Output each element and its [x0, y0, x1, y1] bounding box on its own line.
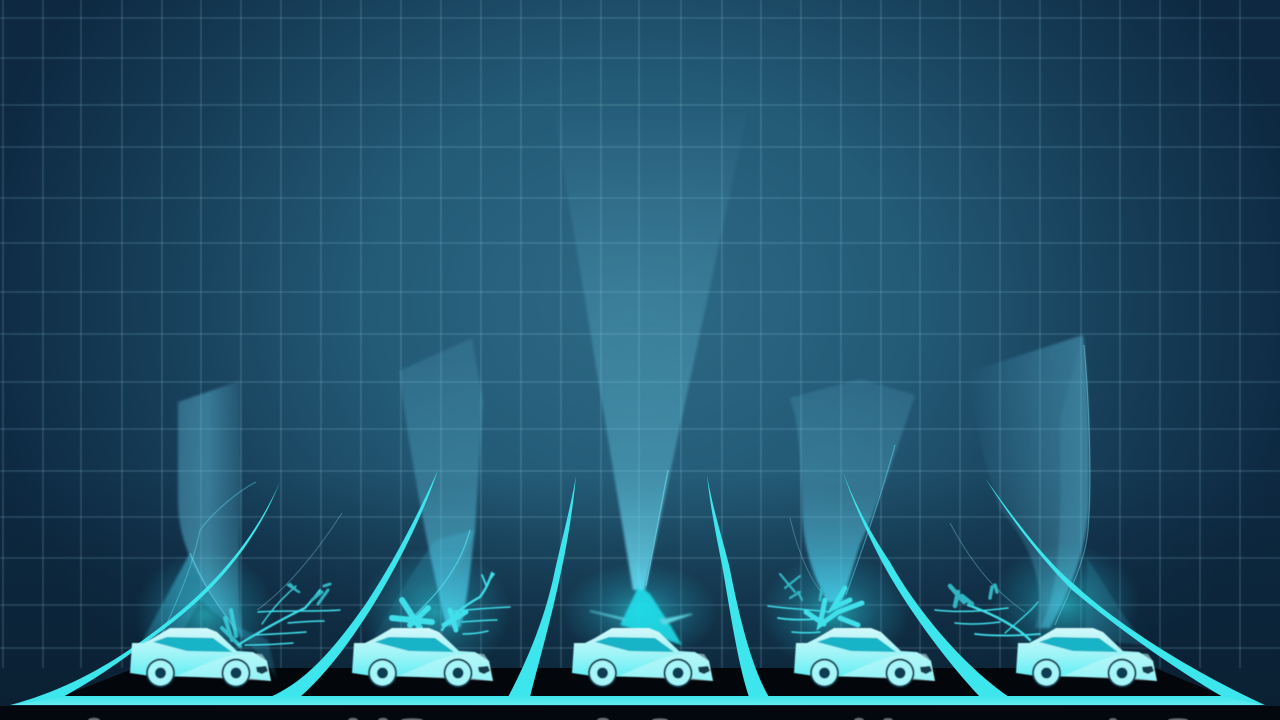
- panel: branches car 2: [392, 573, 510, 634]
- panel: branches car 1: [222, 584, 340, 646]
- road: curved edge 2: [270, 470, 438, 697]
- panel: beam car 4: [760, 379, 915, 670]
- panel: beam car 1: [135, 381, 342, 680]
- car 4: [794, 628, 935, 688]
- car 5: [1016, 628, 1157, 688]
- car 2: [352, 628, 493, 688]
- road: curved edge 5: [843, 472, 1009, 697]
- panel: impact star car 3: [590, 560, 692, 645]
- road: curved edge 4: [707, 475, 769, 697]
- road: curved edge 3: [508, 476, 576, 697]
- panel: branches car 4: [768, 574, 862, 633]
- road: base strip: [10, 696, 1265, 705]
- black road surface: [63, 668, 1223, 696]
- panel: branches car 5: [935, 585, 1040, 640]
- panel: beam car 5: [950, 335, 1145, 667]
- road: curved edge 1: [10, 482, 280, 705]
- panel: beam car 2: [360, 338, 510, 677]
- car 3: [572, 628, 713, 688]
- bottom black band: [0, 706, 1280, 720]
- cropped bottom labels (tops only, illegible in the reference): [88, 718, 1188, 720]
- car 1: [130, 628, 271, 688]
- road: curved edge 6: [985, 478, 1265, 705]
- panel: beam car 3: [552, 100, 750, 662]
